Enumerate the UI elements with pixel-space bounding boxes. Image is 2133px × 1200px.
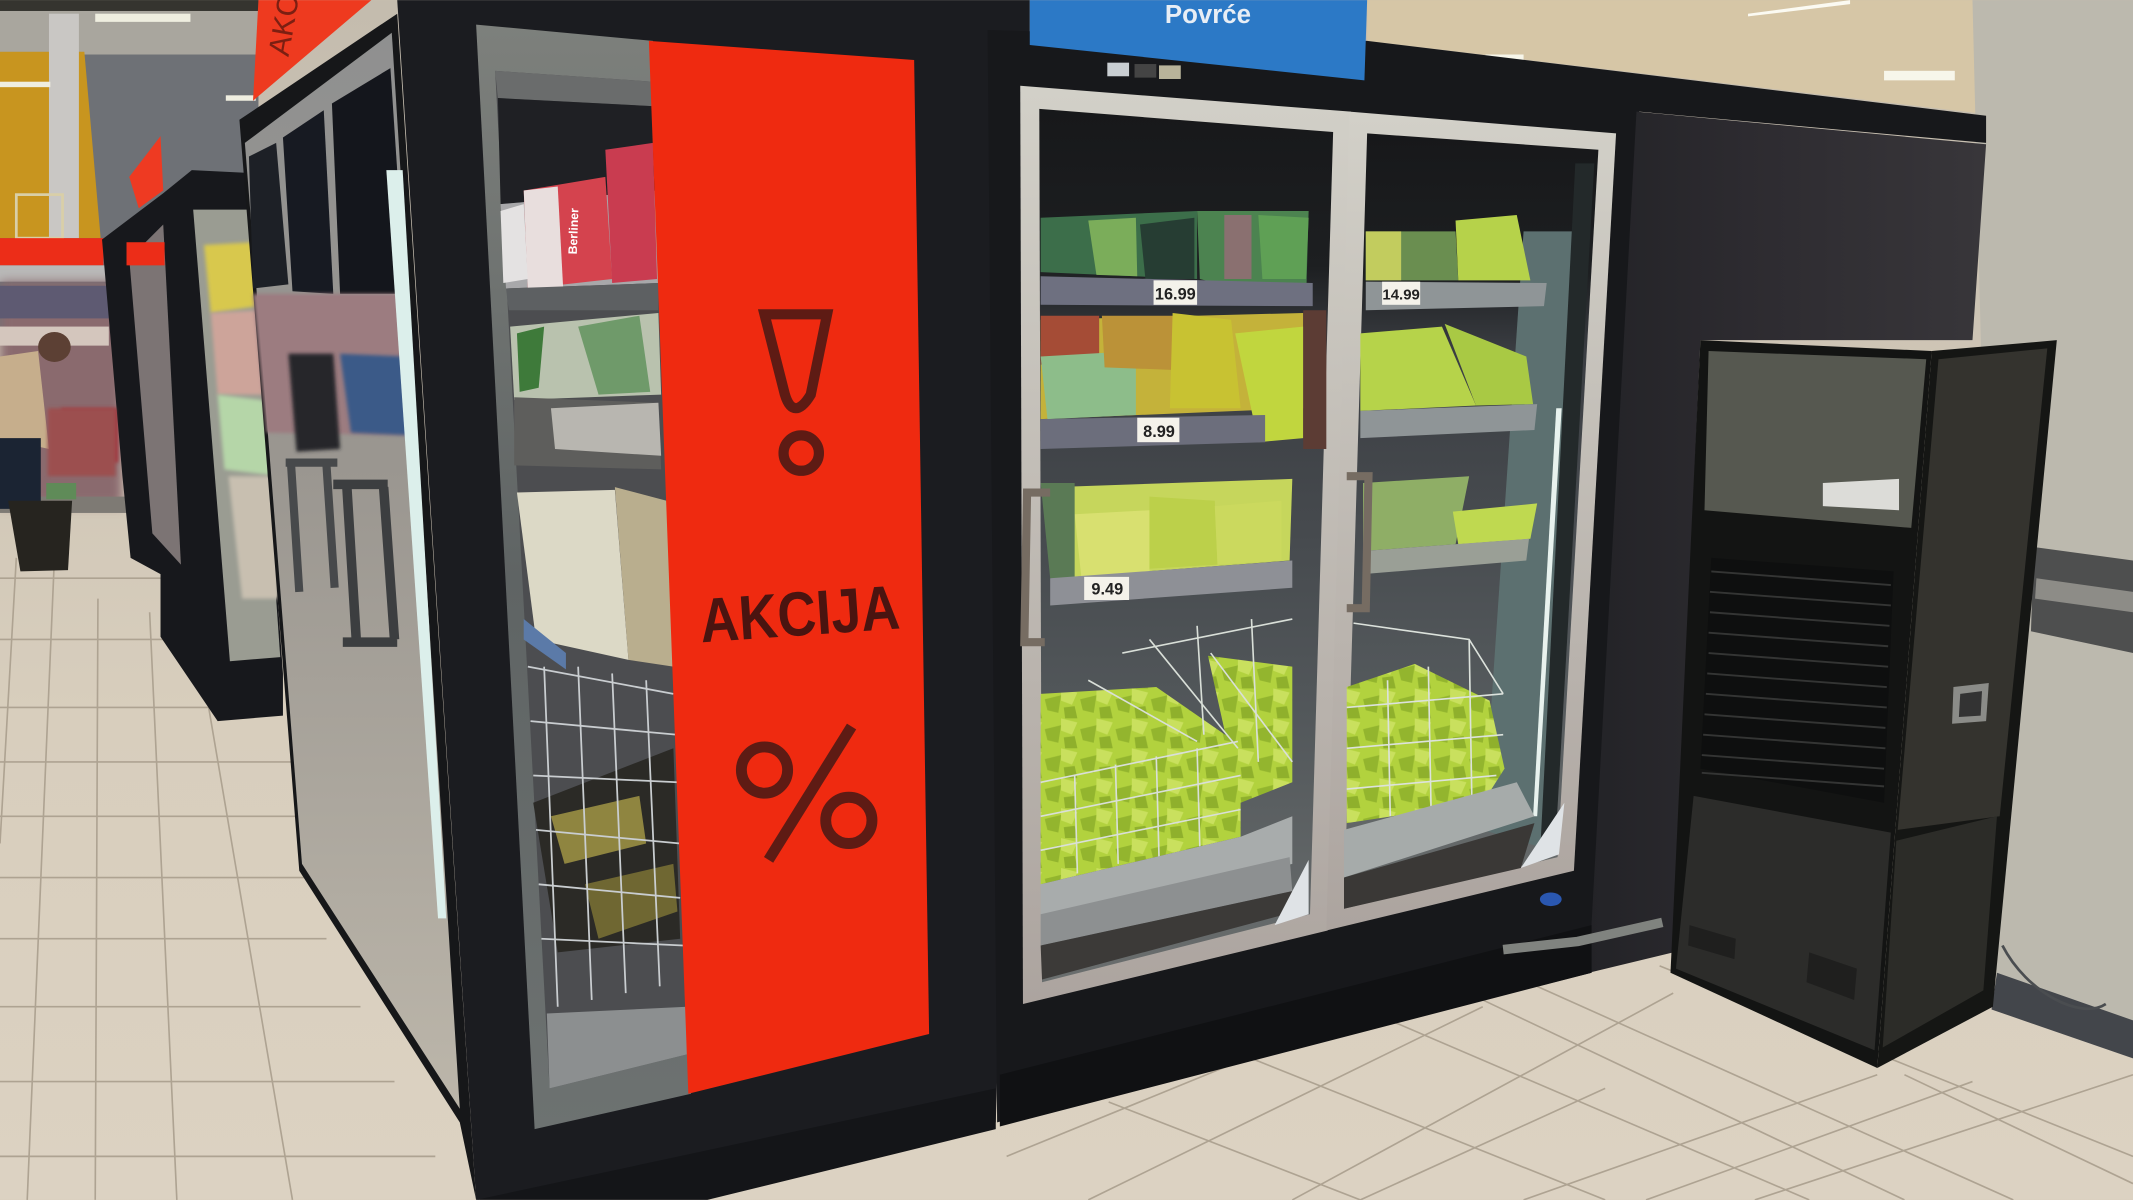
door handle xyxy=(1347,476,1368,608)
door handle xyxy=(1024,493,1050,642)
left freezer glass door xyxy=(476,25,691,1129)
right freezer body xyxy=(988,30,1986,1126)
freezer door one xyxy=(1020,86,1351,1004)
frozen veg: second shelf xyxy=(1041,310,1326,449)
shelf goods: red boxes xyxy=(501,143,657,288)
ceiling, right xyxy=(1367,0,2000,116)
price tag xyxy=(1154,280,1197,305)
frozen veg: top shelf xyxy=(1041,211,1309,306)
shelf goods: boxes xyxy=(517,490,628,660)
AKCIJA label: AKCIJA xyxy=(698,573,902,656)
sticker xyxy=(1823,479,1899,510)
blue cap xyxy=(1540,892,1562,906)
price tag: 14.99 xyxy=(1382,286,1420,303)
freezer door two xyxy=(1326,112,1616,931)
frozen veg: third shelf xyxy=(1363,476,1537,551)
wire basket xyxy=(528,667,683,1007)
price tag: 9.49 xyxy=(1091,581,1123,599)
price tag: 16.99 xyxy=(1155,285,1196,303)
distant freezer, left aisle xyxy=(102,136,283,721)
blue category sign: Povrće xyxy=(1165,1,1251,29)
shelf goods: red boxes: Berliner xyxy=(566,208,581,255)
icon: exclamation mark xyxy=(765,314,827,471)
icon: percent sign xyxy=(741,727,872,860)
vent grille xyxy=(1041,816,1292,925)
wire basket with frozen veg xyxy=(1041,619,1292,884)
price tag: 8.99 xyxy=(1143,423,1175,441)
corner sticker xyxy=(1521,803,1564,868)
wall, right xyxy=(1972,0,2133,1058)
left side glass doors xyxy=(239,14,476,1200)
price tag xyxy=(1084,577,1129,600)
price tag xyxy=(1137,418,1179,442)
unit window xyxy=(1704,351,1926,528)
lower vents xyxy=(1688,925,1736,959)
black ventilation unit xyxy=(1670,340,2057,1068)
unit latch xyxy=(1952,683,1989,724)
blue category sign xyxy=(1030,0,1367,80)
frozen veg: third shelf xyxy=(1041,479,1292,578)
main freezer body xyxy=(397,0,1030,1200)
frozen veg: top shelf xyxy=(1366,215,1530,280)
frozen veg: second shelf xyxy=(1360,324,1533,411)
drain pipe xyxy=(1503,922,1662,950)
unit lower panel xyxy=(1676,796,1891,1050)
vent grille xyxy=(1344,782,1534,878)
shopper with basket xyxy=(0,332,116,571)
wire basket with frozen veg xyxy=(1347,623,1505,823)
red header, top-left xyxy=(253,0,371,101)
floor tile lines xyxy=(0,558,2133,1200)
shelf goods: green bags xyxy=(510,313,661,400)
unit grille xyxy=(1700,558,1894,803)
corner sticker xyxy=(1275,860,1309,925)
red AKCIJA panel xyxy=(649,41,929,1094)
small labels above doors xyxy=(1107,63,1181,79)
door handles xyxy=(333,484,397,642)
